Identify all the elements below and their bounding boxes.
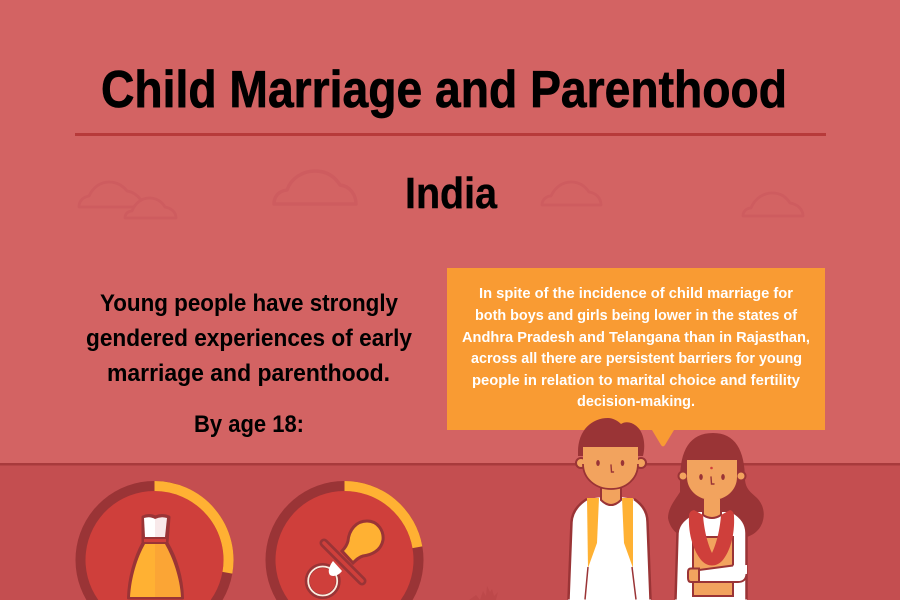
boy neck — [601, 485, 621, 505]
title underline — [75, 133, 826, 136]
boy hair — [578, 418, 644, 456]
intro text block: Young people have strongly — [100, 290, 398, 317]
donut chart: parent by 18 — [266, 481, 424, 600]
girl features — [699, 467, 725, 484]
boy features — [596, 460, 624, 472]
speech bubble callout: Andhra Pradesh and Telangana than in Rajasthan, — [462, 329, 810, 346]
donut chart: married by 18 — [76, 481, 234, 600]
subtitle: India: India — [405, 169, 497, 218]
backpack straps — [587, 498, 633, 568]
intro text block: marriage and parenthood. — [107, 360, 390, 387]
boy body — [568, 497, 651, 600]
girl body outline — [676, 512, 746, 600]
girl arm outline — [699, 566, 746, 582]
girl hand — [688, 568, 699, 582]
intro text block: gendered experiences of early — [86, 325, 412, 352]
boy face — [583, 447, 638, 489]
ground band — [0, 464, 900, 600]
girl neck — [703, 498, 721, 518]
girl arm — [699, 565, 747, 582]
girl body — [675, 512, 747, 600]
speech bubble callout: across all there are persistent barriers for young — [471, 350, 802, 367]
boy ears — [576, 458, 646, 468]
illustration: girl — [668, 433, 764, 600]
speech bubble callout: decision-making. — [577, 393, 695, 410]
boy chin line — [583, 464, 638, 489]
red scarf — [689, 510, 734, 566]
title: Child Marriage and Parenthood — [101, 61, 787, 119]
background clouds — [79, 171, 803, 218]
girl face — [687, 460, 737, 500]
speech bubble callout: In spite of the incidence of child marriage for — [479, 285, 793, 302]
speech bubble callout — [447, 268, 825, 446]
by age 18 label: By age 18: — [194, 411, 304, 438]
girl hair — [668, 433, 764, 538]
intro text block — [86, 290, 412, 387]
boy body outline — [568, 499, 650, 600]
girl ears — [678, 472, 746, 480]
icon: dress — [128, 516, 182, 598]
background plant — [469, 586, 498, 600]
icon: pacifier — [307, 521, 383, 596]
book — [693, 537, 733, 596]
illustration: boy — [568, 418, 651, 600]
sky background — [0, 0, 900, 464]
speech bubble callout: both boys and girls being lower in the states of — [475, 307, 798, 324]
speech bubble callout: people in relation to marital choice and fertility — [472, 372, 801, 389]
